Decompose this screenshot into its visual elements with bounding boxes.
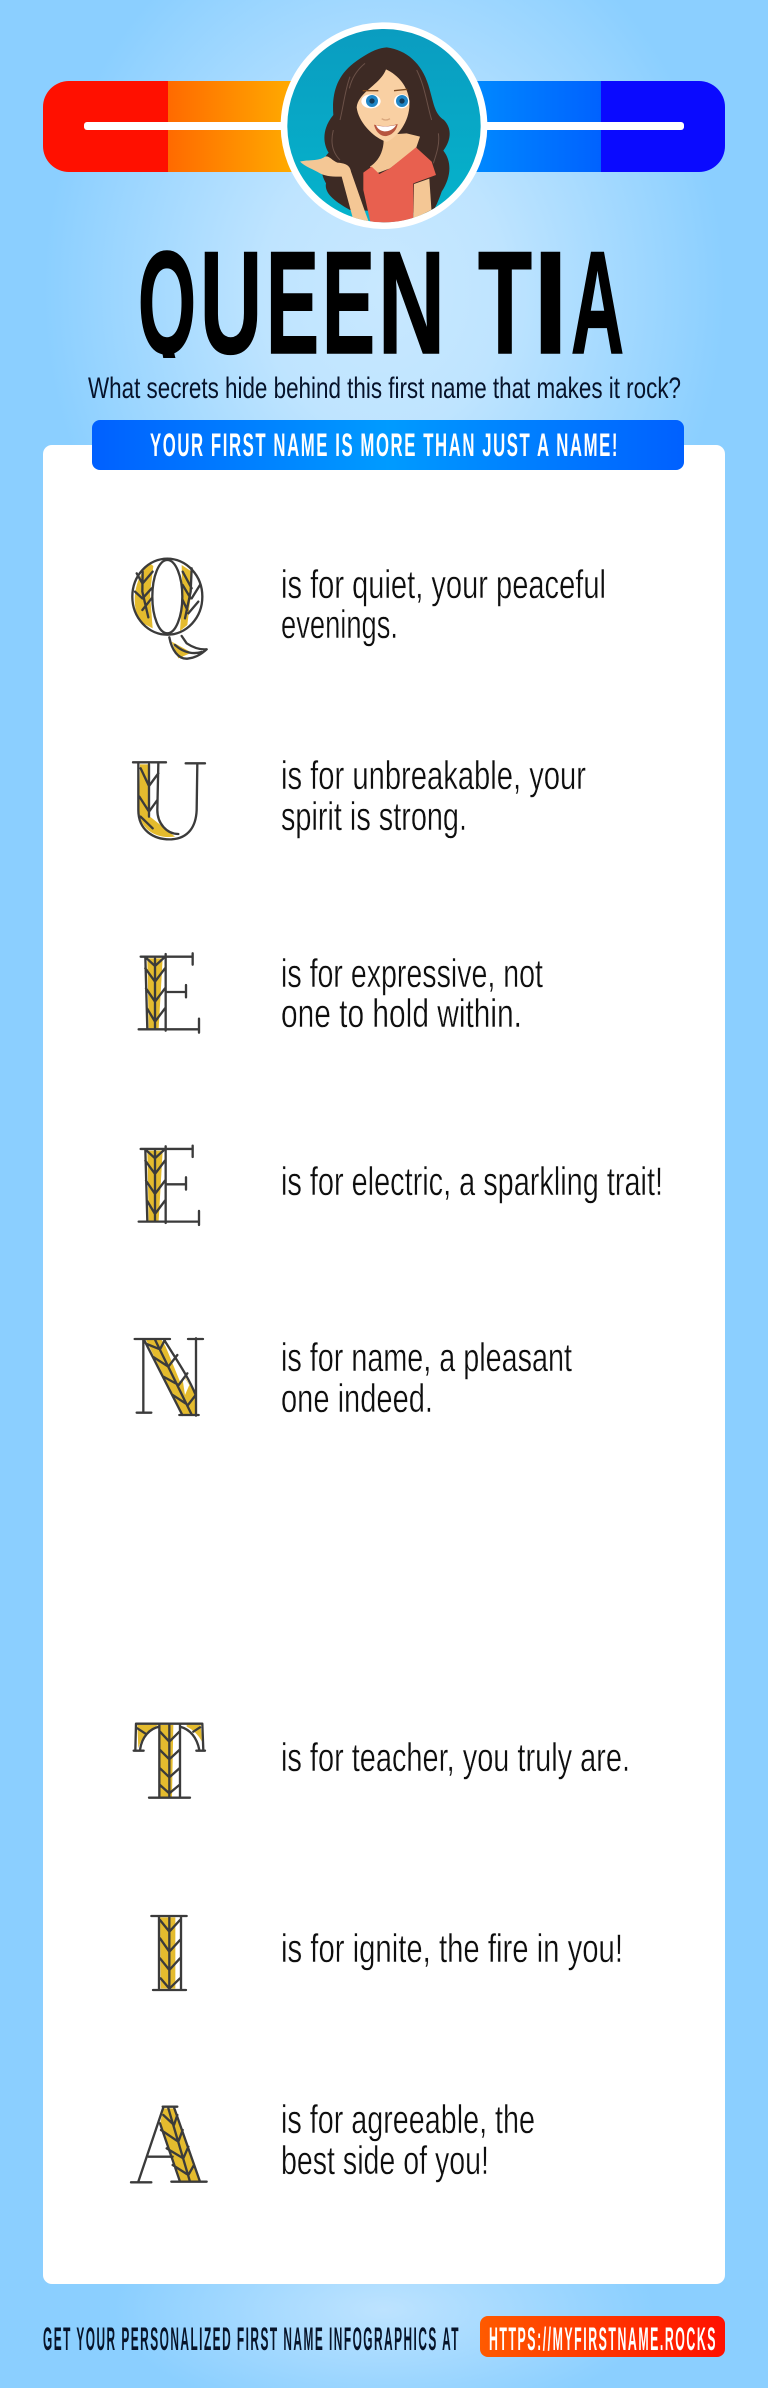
icon: letter A xyxy=(131,2107,207,2182)
icon: letter U xyxy=(133,762,205,839)
letter row N xyxy=(135,1336,572,1421)
icon: letter E xyxy=(139,953,199,1033)
avatar: cartoon woman in circle xyxy=(284,26,484,226)
text: Q: is for quiet, your peaceful xyxy=(281,563,606,607)
text: N xyxy=(281,1336,572,1421)
text: T: is for teacher, you truly are. xyxy=(281,1736,630,1780)
letter row A xyxy=(131,2098,535,2183)
white slider line xyxy=(84,122,684,130)
letter row I xyxy=(151,1916,623,1990)
letter row T xyxy=(134,1724,630,1798)
text: U: spirit is strong. xyxy=(281,795,467,839)
banner xyxy=(92,420,684,470)
text: U: is for unbreakable, your xyxy=(281,754,586,798)
text: E xyxy=(281,952,543,1036)
letter row E second xyxy=(139,1146,663,1225)
text: A: is for agreeable, the xyxy=(281,2098,535,2142)
text: Q xyxy=(281,563,606,647)
title: E xyxy=(322,221,375,384)
icon: letter N xyxy=(135,1338,203,1416)
title: E xyxy=(266,221,319,384)
title: T xyxy=(478,221,532,384)
title: I xyxy=(533,221,568,384)
icon: letter E xyxy=(139,1146,199,1225)
icon: letter Q xyxy=(132,559,207,659)
icon: letter I xyxy=(151,1916,187,1990)
text: N: one indeed. xyxy=(281,1377,433,1421)
text: I: is for ignite, the fire in you! xyxy=(281,1927,623,1971)
text: U xyxy=(281,754,586,839)
letter row Q xyxy=(132,559,606,659)
letter row E xyxy=(139,952,543,1036)
header colour bar xyxy=(43,81,725,172)
title: A xyxy=(571,221,624,384)
letter row U xyxy=(133,754,586,839)
text: A xyxy=(281,2098,535,2183)
title: N xyxy=(378,221,445,384)
text: E: one to hold within. xyxy=(281,992,522,1036)
white content panel xyxy=(43,445,725,2284)
text: E: is for expressive, not xyxy=(281,952,543,996)
icon: letter T xyxy=(134,1724,205,1798)
text: Q: evenings. xyxy=(281,603,398,647)
text: N: is for name, a pleasant xyxy=(281,1336,572,1380)
text: A: best side of you! xyxy=(281,2139,489,2183)
title: Q xyxy=(138,221,196,384)
title: U xyxy=(200,221,262,384)
